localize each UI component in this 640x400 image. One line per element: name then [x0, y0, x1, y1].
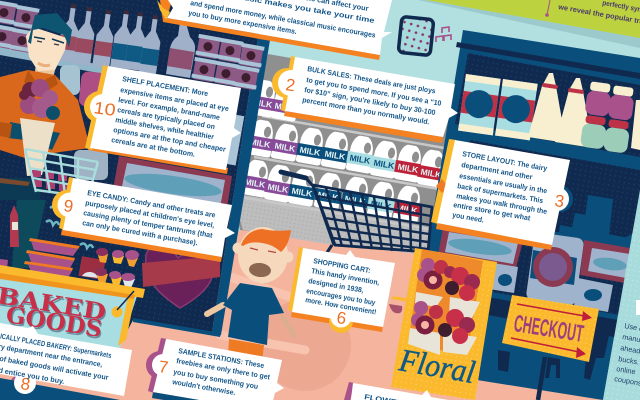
- number 10: 10: [92, 98, 117, 120]
- card: bulk sales: BULK SALES: These deals are just ploys: [307, 64, 436, 96]
- card: shelf placement: cereals are at the bottom.: [111, 135, 196, 159]
- boy: [207, 227, 294, 362]
- milk section: MILK: [274, 140, 297, 154]
- bakery sign: GOODS: [5, 303, 105, 345]
- card: shopping cart: encourages you to buy: [306, 286, 377, 307]
- milk section: MILK: [349, 152, 372, 166]
- card: music: you to buy more expensive items.: [188, 8, 298, 36]
- jars beneath man: [60, 65, 244, 180]
- teal coupon panel right: online: [616, 364, 636, 376]
- card: store layout: [431, 139, 573, 250]
- milk section: MILK: [370, 198, 393, 212]
- right cabinet: [427, 30, 640, 400]
- number 2: 2: [284, 75, 296, 95]
- lime strip bottom left: [0, 392, 30, 400]
- card: flowers: [344, 382, 490, 400]
- shelf light rail: [0, 47, 108, 74]
- card: store layout: entire store to get what: [453, 200, 532, 223]
- card: bulk sales: [272, 56, 458, 143]
- card: shelf placement: [84, 65, 241, 174]
- card: bulk sales: to get you to spend more. If you see a “10: [306, 75, 442, 108]
- bakery shelf items: [0, 198, 139, 288]
- milk section: MILK: [274, 100, 297, 114]
- shelf base band: [133, 318, 221, 337]
- card: shopping cart: This handy invention,: [311, 266, 380, 287]
- milk section: MILK: [251, 96, 274, 110]
- milk section: MILK: [291, 185, 314, 199]
- milk section: MILK: [397, 161, 420, 175]
- heart box: [142, 246, 220, 308]
- card: shelf placement: cereals are typically placed on: [117, 105, 216, 131]
- teal coupon panel right: bucks.: [618, 354, 640, 367]
- milk section: MILK: [299, 144, 322, 158]
- bottles: [57, 3, 195, 78]
- milk section: MILK: [373, 157, 396, 171]
- number 6: 6: [335, 308, 347, 328]
- card: shelf placement: expensive items are placed at eye: [120, 85, 230, 113]
- card: shopping cart: [288, 247, 395, 333]
- number 8: 8: [19, 374, 31, 394]
- card: bulk sales: for $10” sign, you're likely to buy 30-100: [304, 85, 436, 117]
- milk section: MILK: [244, 176, 267, 190]
- card: eye candy: can only be cured with a purchase).: [82, 218, 198, 247]
- card: eye candy: [52, 177, 235, 262]
- card: shopping cart: more. How convenient!: [305, 295, 377, 316]
- card: store layout: makes you walk through the: [456, 191, 548, 216]
- card: shelf placement: level. For example, brand-name: [118, 95, 221, 122]
- bakery sign: GOODS: [4, 301, 104, 343]
- cabinet lower goods: [438, 228, 630, 312]
- speaker icon: [398, 16, 434, 56]
- milk section: MILK: [324, 148, 347, 162]
- card: store layout: back of supermarkets. This: [457, 181, 544, 205]
- card: eye candy: EYE CANDY: Candy and other treats are: [87, 188, 216, 220]
- misc yellow purple shape by cart card: [389, 296, 410, 313]
- floor: [0, 228, 640, 400]
- card: sample stations: SAMPLE STATIONS: These: [178, 346, 265, 370]
- floor shadow circle: [259, 299, 351, 391]
- card: sample stations: freebies are only there to get: [176, 356, 271, 382]
- card: bakery: [0, 323, 132, 400]
- milk section: MILK: [249, 136, 272, 150]
- card: sample stations: wouldn't otherwise.: [171, 377, 236, 397]
- milk section: MILK: [267, 181, 290, 195]
- card: store layout: department and other: [461, 160, 533, 181]
- hand basket: [25, 149, 98, 197]
- microwave box under shelf card: [112, 156, 232, 215]
- card: eye candy: causing plenty of temper tantrums (that: [83, 208, 214, 240]
- lime banner top right: [418, 0, 640, 48]
- shelf pole: [212, 38, 270, 335]
- card: store layout: you need.: [452, 210, 485, 225]
- card: eye candy: purposely placed at children's eye level,: [85, 198, 215, 230]
- card: bulk sales: percent more than you normally would.: [302, 95, 430, 126]
- milk section: [232, 54, 462, 255]
- milk section: MILK: [344, 193, 367, 207]
- man: [0, 13, 90, 200]
- milk section: MILK: [396, 202, 419, 216]
- card: shelf placement: options are at the top and cheaper: [113, 125, 227, 154]
- milk section: MILK: [317, 189, 340, 203]
- milk section: MILK: [420, 166, 443, 180]
- floor light stripe: [220, 277, 305, 350]
- teal coupon panel right: [603, 190, 640, 400]
- card: store layout: essentials are usually in the: [459, 171, 548, 195]
- number 9: 9: [62, 196, 74, 216]
- card: shelf placement: SHELF PLACEMENT: More: [122, 74, 209, 98]
- number 3: 3: [553, 191, 565, 211]
- floral sign: Floral: [396, 341, 478, 390]
- card: sample stations: [146, 338, 284, 400]
- card: music: [157, 0, 392, 60]
- card: shelf placement: middle shelves, while healthier: [115, 115, 215, 141]
- bakery sign: [0, 265, 145, 348]
- checkout sign: [502, 295, 599, 400]
- number 7: 7: [157, 357, 169, 377]
- cabinet upper shelf cans and bottles: [458, 73, 640, 154]
- card: shopping cart: SHOPPING CART:: [313, 256, 371, 275]
- card: store layout: STORE LAYOUT: The dairy: [462, 149, 549, 173]
- shopping cart: [281, 172, 432, 254]
- floral sign: [391, 248, 497, 400]
- cans top left: [0, 0, 40, 53]
- cans right of bottles: [191, 34, 265, 90]
- card: sample stations: you to buy something you: [173, 367, 259, 391]
- icon: music notes: [436, 27, 451, 42]
- left shelf navy background: [0, 0, 272, 345]
- card: shopping cart: designed in 1938,: [308, 276, 364, 295]
